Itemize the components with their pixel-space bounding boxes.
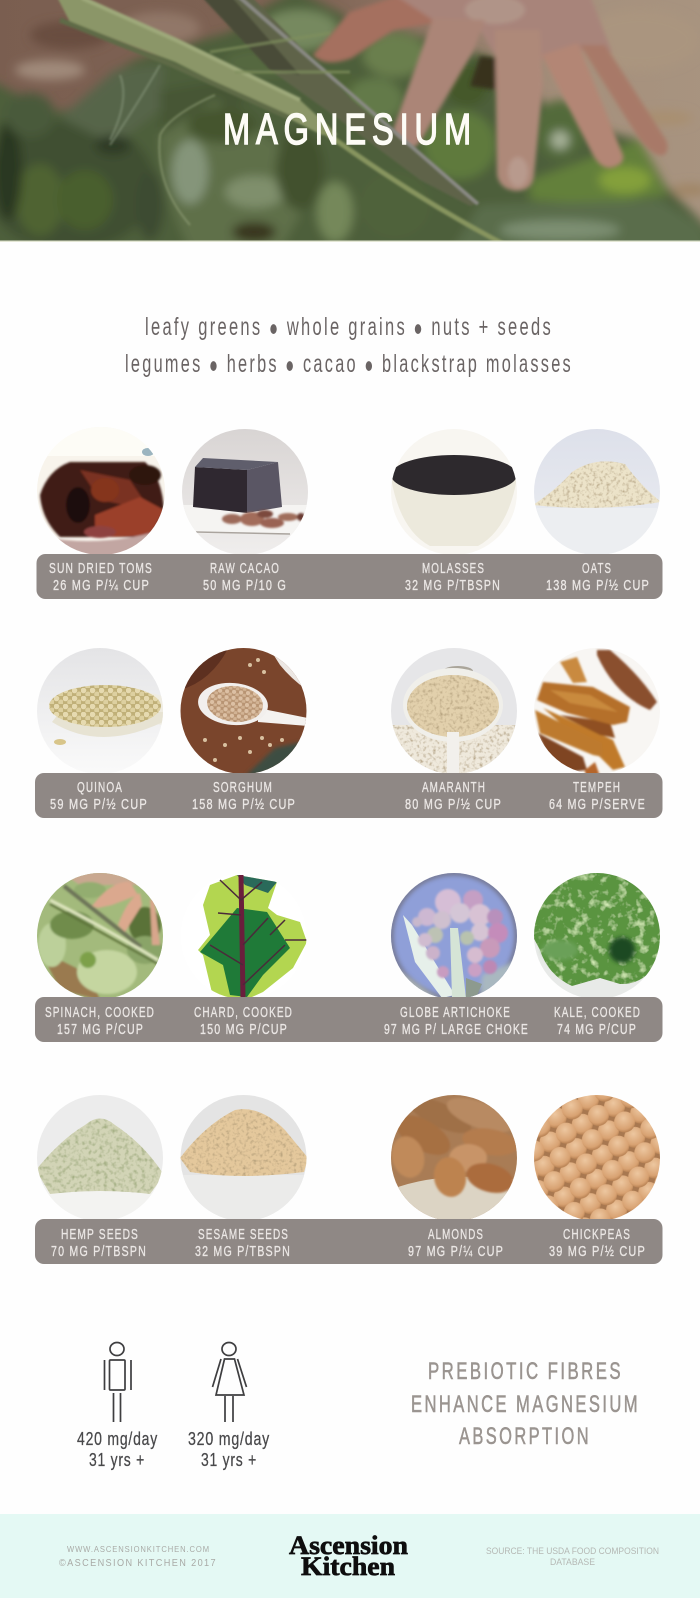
label bar <box>36 554 662 599</box>
intro text: food groups: blackstrap molasses <box>375 350 573 378</box>
photo: almonds <box>391 1095 517 1219</box>
label: globe artichoke <box>384 1005 529 1038</box>
label: sesame seeds: SESAME SEEDS <box>198 1227 289 1243</box>
footer: source: SOURCE: THE USDA FOOD COMPOSITION <box>486 1546 659 1556</box>
callout: prebiotic fibres <box>411 1358 640 1450</box>
footer: source <box>486 1546 659 1567</box>
label: amaranth: 80 MG P/½ CUP <box>405 797 502 813</box>
footer: website and copyright: WWW.ASCENSIONKITCHEN.COM <box>67 1544 210 1554</box>
label: kale: 74 MG P/CUP <box>557 1022 637 1038</box>
label: almonds: ALMONDS <box>428 1227 484 1243</box>
label: kale <box>554 1005 641 1038</box>
label: quinoa: QUINOA <box>77 780 123 796</box>
label: tempeh <box>549 780 646 813</box>
label: sorghum: SORGHUM <box>213 780 273 796</box>
label: kale: KALE, COOKED <box>554 1005 641 1021</box>
footer: website and copyright: ©ASCENSION KITCHEN 2017 <box>59 1558 217 1569</box>
daily intake: men: 420 mg/day <box>77 1429 158 1449</box>
label: chard <box>194 1005 293 1038</box>
label: raw cacao <box>203 561 287 594</box>
label bar <box>35 773 662 818</box>
footer: website and copyright <box>59 1544 217 1569</box>
photo: sesame seeds <box>178 1094 310 1222</box>
daily intake: women: 31 yrs + <box>201 1450 257 1470</box>
photo: raw cacao <box>180 428 310 556</box>
label: chickpeas <box>549 1227 646 1260</box>
icon: male figure <box>104 1342 131 1422</box>
label: raw cacao: RAW CACAO <box>210 561 280 577</box>
label bar <box>35 997 662 1042</box>
label: molasses <box>405 561 501 594</box>
logo: Ascension Kitchen: Ascension <box>289 1531 409 1560</box>
label: hemp seeds <box>51 1227 147 1260</box>
label: tempeh: TEMPEH <box>573 780 621 796</box>
photo: molasses bowl <box>390 428 520 556</box>
label bar <box>35 1219 662 1264</box>
intro text: food groups: • <box>269 308 280 349</box>
label: hemp seeds: HEMP SEEDS <box>61 1227 139 1243</box>
label: hemp seeds: 70 MG P/TBSPN <box>51 1244 147 1260</box>
photo: kale <box>532 872 662 1000</box>
label: quinoa <box>50 780 148 813</box>
label: chickpeas: CHICKPEAS <box>563 1227 631 1243</box>
intro text: food groups <box>125 308 573 386</box>
label: chard: CHARD, COOKED <box>194 1005 293 1021</box>
photo: chickpeas <box>532 1094 662 1222</box>
photo: spinach being cut <box>36 872 166 1000</box>
title: MAGNESIUM <box>223 105 477 154</box>
label: sun dried toms: 26 MG P/¼ CUP <box>53 578 150 594</box>
label: chard: 150 MG P/CUP <box>200 1022 288 1038</box>
footer: source: DATABASE <box>550 1557 595 1567</box>
panel: row 1 foods <box>36 426 662 599</box>
panel: row 4 foods <box>35 1090 662 1264</box>
label: sorghum <box>192 780 296 813</box>
callout: prebiotic fibres: ABSORPTION <box>459 1423 591 1450</box>
photo: globe artichoke <box>390 872 520 1000</box>
label: globe artichoke: 97 MG P/ LARGE CHOKE <box>384 1022 529 1038</box>
photo: sun dried tomatoes <box>36 426 166 558</box>
hero bottom edge <box>0 240 700 242</box>
intro text: food groups: • <box>414 308 425 349</box>
photo: hemp seeds <box>36 1094 166 1222</box>
intro text: food groups: herbs <box>220 350 286 378</box>
photo: oats <box>532 428 662 556</box>
icon: female figure <box>212 1342 246 1422</box>
label: globe artichoke: GLOBE ARTICHOKE <box>400 1005 511 1021</box>
intro text: food groups: nuts + seeds <box>425 313 553 341</box>
photo: tempeh strips <box>532 648 662 776</box>
label: oats <box>546 561 650 594</box>
intro text: food groups: legumes <box>125 350 244 378</box>
panel: row 3 foods <box>35 872 662 1042</box>
label: oats: OATS <box>582 561 612 577</box>
label: oats: 138 MG P/½ CUP <box>546 578 650 594</box>
label: spinach <box>45 1005 155 1038</box>
photo: quinoa <box>37 648 163 752</box>
intro text: food groups: • <box>365 345 375 386</box>
daily intake: women: 320 mg/day <box>188 1429 270 1449</box>
label: tempeh: 64 MG P/SERVE <box>549 797 646 813</box>
label: amaranth: AMARANTH <box>422 780 486 796</box>
label: almonds <box>408 1227 504 1260</box>
label: molasses: MOLASSES <box>422 561 485 577</box>
intro text: food groups: leafy greens <box>145 313 323 341</box>
label: sun dried toms: SUN DRIED TOMS <box>49 561 153 577</box>
photo: chard leaf <box>198 875 306 997</box>
label: raw cacao: 50 MG P/10 G <box>203 578 287 594</box>
label: sorghum: 158 MG P/½ CUP <box>192 797 296 813</box>
label: sun dried toms <box>49 561 153 594</box>
label: almonds: 97 MG P/¼ CUP <box>408 1244 504 1260</box>
label: spinach: SPINACH, COOKED <box>45 1005 155 1021</box>
hero photo: hand slicing leafy greens <box>0 0 700 240</box>
label: sesame seeds: 32 MG P/TBSPN <box>195 1244 291 1260</box>
intro text: food groups: cacao <box>296 350 365 378</box>
label: spinach: 157 MG P/CUP <box>57 1022 144 1038</box>
callout: prebiotic fibres: PREBIOTIC FIBRES <box>428 1358 623 1385</box>
photo: amaranth on a spoon <box>390 648 520 776</box>
label: molasses: 32 MG P/TBSPN <box>405 578 501 594</box>
daily intake: women <box>188 1429 270 1470</box>
intro text: food groups: whole grains <box>280 313 414 341</box>
intro text: food groups: • <box>209 345 220 386</box>
footer band <box>0 1514 700 1598</box>
logo: Ascension Kitchen: Kitchen <box>301 1552 396 1581</box>
label: chickpeas: 39 MG P/½ CUP <box>549 1244 646 1260</box>
intro text: food groups: • <box>286 345 296 386</box>
daily intake: men <box>77 1429 158 1470</box>
logo: Ascension Kitchen <box>289 1531 409 1581</box>
label: quinoa: 59 MG P/½ CUP <box>50 797 148 813</box>
daily intake: men: 31 yrs + <box>89 1450 145 1470</box>
photo: sorghum on a spoon <box>180 648 306 773</box>
label: amaranth <box>405 780 502 813</box>
panel: row 2 foods <box>35 640 662 818</box>
label: sesame seeds <box>195 1227 291 1260</box>
